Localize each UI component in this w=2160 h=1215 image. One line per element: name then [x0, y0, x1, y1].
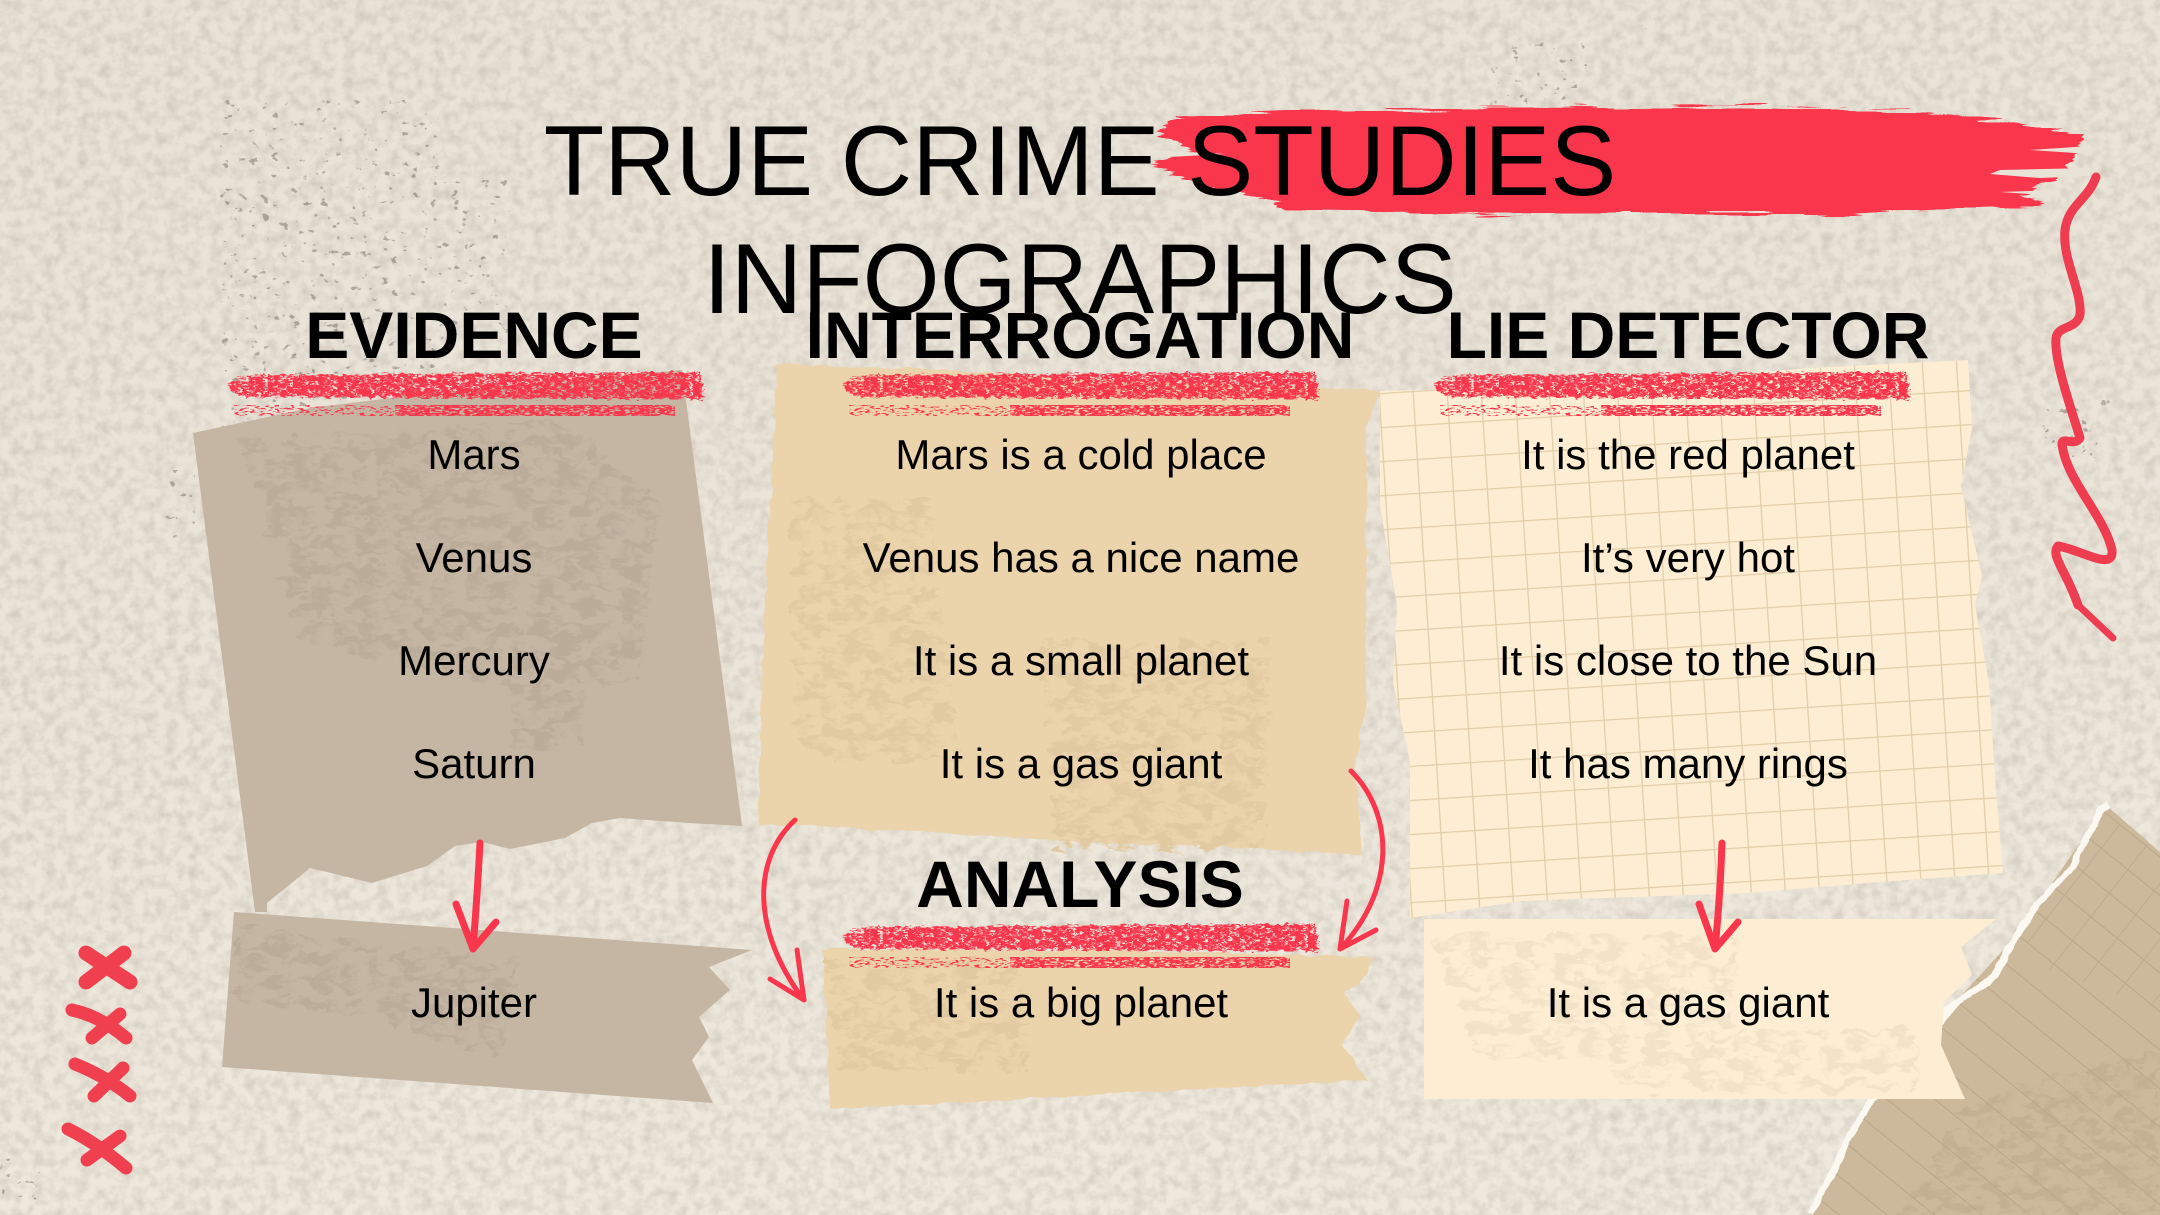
icon: x mark 4	[68, 1129, 126, 1168]
arrow: interrogation curve right to analysis	[1340, 771, 1383, 949]
panel: interrogation paper	[758, 364, 1380, 856]
heading: analysis: ANALYSIS	[916, 847, 1244, 921]
text: big planet: It is a big planet	[934, 979, 1228, 1026]
text block: evidence list	[398, 431, 550, 787]
title	[544, 105, 1616, 334]
icon: x mark 2	[72, 1010, 126, 1038]
arrow: lie detector to gas giant	[1699, 843, 1738, 949]
arrow: evidence to jupiter	[456, 843, 496, 949]
text block: interrogation list	[863, 431, 1299, 787]
decorative torn paper: bottom right corner	[1810, 805, 2160, 1215]
text block: evidence list: Venus	[416, 534, 532, 581]
text block: interrogation list: Mars is a cold place	[895, 431, 1267, 478]
text block: evidence list: Mercury	[398, 637, 550, 684]
heading: interrogation: INTERROGATION	[806, 298, 1354, 372]
brush underline: interrogation	[844, 372, 1319, 416]
icon: red x marks	[68, 953, 130, 1168]
icon: x mark 3	[75, 1064, 130, 1096]
heading: lie detector: LIE DETECTOR	[1447, 298, 1929, 372]
panel: analysis paper	[823, 949, 1375, 1109]
text: jupiter: Jupiter	[411, 979, 537, 1026]
brush underline: lie detector	[1435, 372, 1910, 416]
red brush stroke behind title	[1149, 107, 2090, 214]
text block: lie detector list: It is close to the Sun	[1499, 637, 1877, 684]
title: TRUE CRIME STUDIES	[544, 105, 1616, 216]
text block: lie detector list: It has many rings	[1528, 740, 1848, 787]
arrow: interrogation curve left to analysis	[764, 820, 804, 1000]
icon: x mark 1	[86, 953, 130, 982]
text block: lie detector list: It’s very hot	[1581, 534, 1795, 581]
brush underline: evidence	[229, 372, 704, 416]
text block: interrogation list: It is a gas giant	[940, 740, 1223, 787]
panel: lie detector grid paper	[1380, 360, 2003, 918]
text block: interrogation list: Venus has a nice name	[863, 534, 1299, 581]
text: gas giant: It is a gas giant	[1547, 979, 1830, 1026]
text block: evidence list: Mars	[427, 431, 521, 478]
text block: lie detector list: It is the red planet	[1521, 431, 1855, 478]
panel: lie detector bottom paper	[1424, 919, 1996, 1099]
text block: lie detector list	[1499, 431, 1877, 787]
panel: evidence paper	[193, 370, 742, 912]
text block: interrogation list: It is a small planet	[913, 637, 1249, 684]
panel: jupiter paper	[222, 912, 752, 1103]
text block: evidence list: Saturn	[412, 740, 536, 787]
decorative red squiggle	[2056, 177, 2113, 638]
brush notches	[1150, 146, 2090, 196]
heading: evidence: EVIDENCE	[305, 298, 643, 372]
brush underline: analysis	[844, 924, 1319, 968]
title: INFOGRAPHICS	[703, 223, 1457, 334]
